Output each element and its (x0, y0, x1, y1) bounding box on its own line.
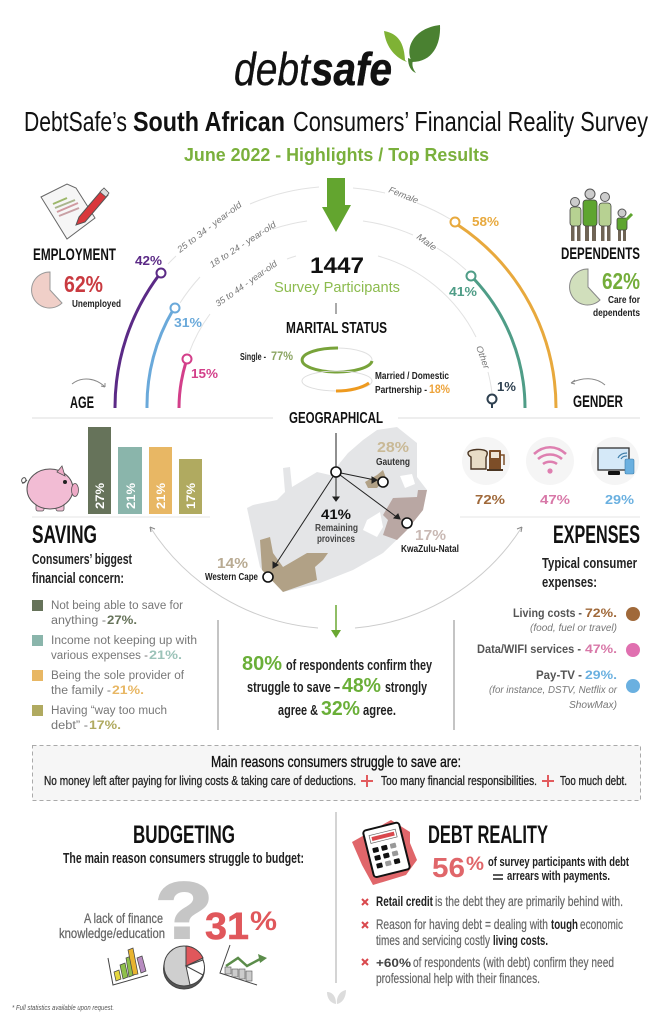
labels: age ranges: 25 to 34 - year-old (174, 199, 244, 255)
label: single 77% (240, 349, 293, 363)
pie: 62% care for dependents (570, 269, 600, 305)
list: expense items: 47%. (585, 644, 617, 656)
label: care for dependents: Care for (608, 295, 640, 306)
legend: saving concerns: anything - (51, 615, 106, 627)
subheading: biggest concern: financial concern: (32, 570, 124, 587)
heading: gender: GENDER (573, 392, 623, 411)
icon: calculator (352, 820, 417, 885)
title: South African (133, 106, 285, 137)
list: expense items: (for instance, DSTV, Netflix or (489, 685, 618, 696)
callout: 80% struggle to save: strongly (385, 679, 427, 696)
stats: age and gender percentages: 1% (497, 380, 516, 394)
stats: age and gender percentages: 58% (472, 215, 499, 229)
title (24, 106, 648, 137)
icon: bread and fuel (462, 437, 510, 485)
stats: expense percentages: 29% (605, 492, 634, 507)
callout: 80% struggle to save: agree & (278, 702, 318, 719)
logo: debtsafe: safe (311, 43, 392, 95)
label: remaining provinces 41%: provinces (317, 534, 355, 545)
stat: 31% (205, 906, 277, 948)
subheading: typical expenses (542, 555, 637, 591)
text: reasons list (44, 773, 627, 788)
text: arrears: arrears with payments. (507, 868, 610, 883)
legend: saving concerns: 17%. (89, 720, 121, 732)
subheading: biggest concern (32, 551, 132, 587)
icon: wifi (526, 437, 574, 485)
label: married 18%: Married / Domestic (375, 370, 449, 382)
label: remaining provinces 41% (315, 506, 358, 545)
stats: age and gender percentages: 15% (191, 367, 218, 381)
bar chart: savings concerns: 21% (154, 483, 168, 509)
stat: 56%: % (466, 854, 484, 875)
text: reasons list: No money left after paying for living costs & taking care of deductions. (44, 773, 356, 788)
stat: 56% (432, 852, 484, 883)
heading: age: AGE (70, 393, 94, 412)
label: unemployed: Unemployed (72, 299, 121, 310)
list: debt bullets: times and servicing costly (376, 932, 490, 948)
legend: saving concerns: Income not keeping up with (51, 635, 197, 647)
icon: bar chart (108, 948, 148, 985)
legend: saving concerns: 21%. (112, 685, 144, 697)
subtitle: June 2022 - Highlights / Top Results (184, 145, 489, 165)
stats: expense percentages (475, 492, 634, 507)
arc: age 35 to 44 (179, 362, 186, 408)
stat: 62%: 62% (64, 271, 103, 297)
legend: saving concerns: Not being able to save for (51, 600, 183, 612)
stats: expense percentages: 47% (540, 492, 570, 507)
arrow: lower arc (150, 527, 522, 628)
stats: age and gender percentages: 31% (174, 316, 202, 330)
panel: dependents (561, 189, 640, 319)
text: arrears (488, 854, 629, 883)
map: South Africa provinces (247, 427, 427, 592)
text: lack of finance knowledge: knowledge/education (59, 925, 165, 941)
heading: main reasons: Main reasons consumers struggle to save are: (211, 754, 461, 771)
subheading: typical expenses: expenses: (542, 574, 597, 591)
bar chart: savings concerns (88, 427, 202, 514)
arrow: main green down arrow (322, 178, 351, 232)
label: married 18% (375, 370, 450, 396)
list: debt bullets: living costs. (493, 932, 548, 948)
label: married 18%: Partnership - (375, 384, 427, 396)
icon: piggy bank (22, 466, 78, 511)
list: expense items: (food, fuel or travel) (530, 623, 617, 634)
legend: saving concerns: debt” - (51, 720, 88, 732)
labels: gender (387, 185, 492, 371)
label: KwaZulu-Natal 17% (401, 527, 459, 555)
callout: 80% struggle to save: of respondents confirm they (286, 657, 432, 674)
list: debt bullets: +60% (376, 956, 411, 970)
icon: line chart (220, 945, 267, 985)
icon: family (570, 189, 632, 241)
callout: 80% struggle to save: 32% (321, 698, 360, 720)
icon: paper and pencil (41, 184, 109, 239)
labels: gender: Other (474, 344, 492, 371)
text: lack of finance knowledge: A lack of finance (84, 910, 163, 926)
labels: age ranges: 18 to 24 - year-old (208, 219, 279, 270)
list: expense items (477, 607, 640, 711)
panel: saving (22, 427, 210, 732)
heading: geographical: GEOGRAPHICAL (289, 410, 383, 427)
legend: saving concerns: Being the sole provider of (51, 670, 185, 682)
list: debt bullets: Reason for having debt = dealing with (376, 916, 548, 932)
labels: gender: Female (387, 185, 420, 205)
arrow: age (72, 379, 105, 387)
stat: 1447 participants: 1447 (310, 253, 364, 278)
icon: small grey leaf (327, 990, 346, 1004)
icon: tv and phone (591, 437, 639, 485)
label: KwaZulu-Natal 17%: 17% (415, 527, 446, 544)
list: expense items: Pay-TV - (536, 670, 582, 682)
label: care for dependents: dependents (593, 308, 640, 319)
arc: female (458, 225, 556, 408)
label: Western Cape 14%: Western Cape (205, 572, 258, 583)
heading: debt reality: DEBT REALITY (428, 821, 548, 849)
list: expense items: ShowMax) (569, 700, 617, 711)
legend: saving concerns: 27%. (107, 615, 137, 627)
list: debt bullets: professional help with their finances. (376, 970, 540, 986)
arc: age 25 to 34 (115, 275, 159, 408)
panel: budgeting (59, 821, 304, 989)
labels: gender: Male (415, 232, 439, 253)
label: survey participants: Survey Participants (274, 279, 400, 296)
panel: debt reality (352, 820, 629, 986)
bar chart: savings concerns: 17% (184, 483, 198, 509)
label: care for dependents (593, 295, 640, 319)
icons: plus signs (361, 775, 554, 787)
stats: expense percentages: 72% (475, 492, 505, 507)
footnote: * Full statistics available upon request. (12, 1005, 114, 1012)
legend: saving concerns: 21%. (149, 650, 182, 662)
legend: saving concerns: the family - (51, 685, 111, 697)
label: remaining provinces 41%: Remaining (315, 523, 358, 534)
label: KwaZulu-Natal 17%: KwaZulu-Natal (401, 544, 459, 555)
panel: expenses (460, 437, 640, 711)
arrows: province links (273, 433, 400, 568)
callout: 80% struggle to save: struggle to save – (247, 679, 340, 696)
list: debt bullets (362, 893, 623, 986)
list: expense items: Data/WIFI services - (477, 644, 581, 656)
bar chart: savings concerns: 21% (124, 483, 138, 509)
label: remaining provinces 41%: 41% (321, 506, 352, 522)
heading: budgeting: BUDGETING (133, 821, 235, 849)
logo: debtsafe: debt (234, 43, 312, 95)
arrow: gender (571, 379, 605, 385)
pie: 62% unemployed (32, 272, 62, 308)
arc: male (474, 279, 525, 408)
panel: employment (32, 184, 121, 310)
bar chart: savings concerns: 27% (93, 483, 107, 509)
label: Western Cape 14%: 14% (217, 555, 248, 572)
list: expense items: 72%. (585, 608, 617, 620)
label: Gauteng 28%: 28% (377, 439, 409, 456)
stat: 56%: 56 (432, 852, 465, 883)
label: Gauteng 28% (376, 439, 410, 468)
list: debt bullets: economic (580, 916, 623, 932)
panel: main reasons box (32, 746, 640, 800)
callout: 80% struggle to save (242, 653, 432, 720)
list: expense items: Living costs - (513, 608, 582, 620)
heading: employment: EMPLOYMENT (33, 245, 116, 264)
stats: age and gender percentages: 41% (449, 285, 477, 299)
icon: pie chart (164, 946, 204, 989)
list: expense items: 29%. (585, 670, 617, 682)
subheading: budgeting: The main reason consumers struggle to budget: (63, 850, 304, 867)
legend: saving concerns: Having “way too much (51, 705, 167, 717)
chart: marital status rings (302, 348, 372, 391)
icon: question mark: ? (155, 866, 213, 955)
callout: 80% struggle to save: agree. (363, 702, 396, 719)
text: lack of finance knowledge (59, 910, 165, 941)
subheading: biggest concern: Consumers’ biggest (32, 551, 132, 568)
heading: saving: SAVING (32, 521, 97, 549)
label: single 77%: Single - (240, 351, 266, 363)
labels: age ranges (174, 199, 280, 309)
callout: 80% struggle to save: 48% (342, 675, 381, 697)
list: debt bullets: Retail credit (376, 893, 433, 909)
legend: saving concerns: various expenses - (51, 650, 148, 662)
heading: marital status: MARITAL STATUS (286, 320, 387, 337)
stat: 31%: 31 (205, 906, 249, 948)
legend: saving concerns (32, 600, 197, 732)
label: single 77%: 77% (271, 349, 293, 363)
label: Gauteng 28%: Gauteng (376, 457, 410, 468)
list: debt bullets: tough (551, 916, 578, 932)
text: reasons list: Too much debt. (560, 773, 627, 788)
callout: 80% struggle to save: 80% (242, 653, 282, 675)
subheading: typical expenses: Typical consumer (542, 555, 637, 572)
labels: age ranges: 35 to 44 - year-old (213, 258, 280, 309)
stat: 31%: % (250, 906, 277, 936)
label: married 18%: 18% (429, 382, 450, 396)
title: DebtSafe’s (24, 106, 127, 137)
chart: semicircle age and gender arcs (115, 187, 556, 408)
logo: debtsafe (234, 25, 440, 95)
label: Western Cape 14% (205, 555, 258, 583)
panel: marital status (240, 320, 450, 396)
arrow: center green arrow (331, 605, 341, 638)
stats: age and gender percentages: 42% (135, 254, 162, 268)
stat: 62%: 62% (602, 268, 640, 294)
text: reasons list: Too many financial responsibilities. (381, 773, 537, 788)
arc: age 18 to 24 (147, 310, 173, 408)
stats: age and gender percentages (135, 215, 516, 394)
